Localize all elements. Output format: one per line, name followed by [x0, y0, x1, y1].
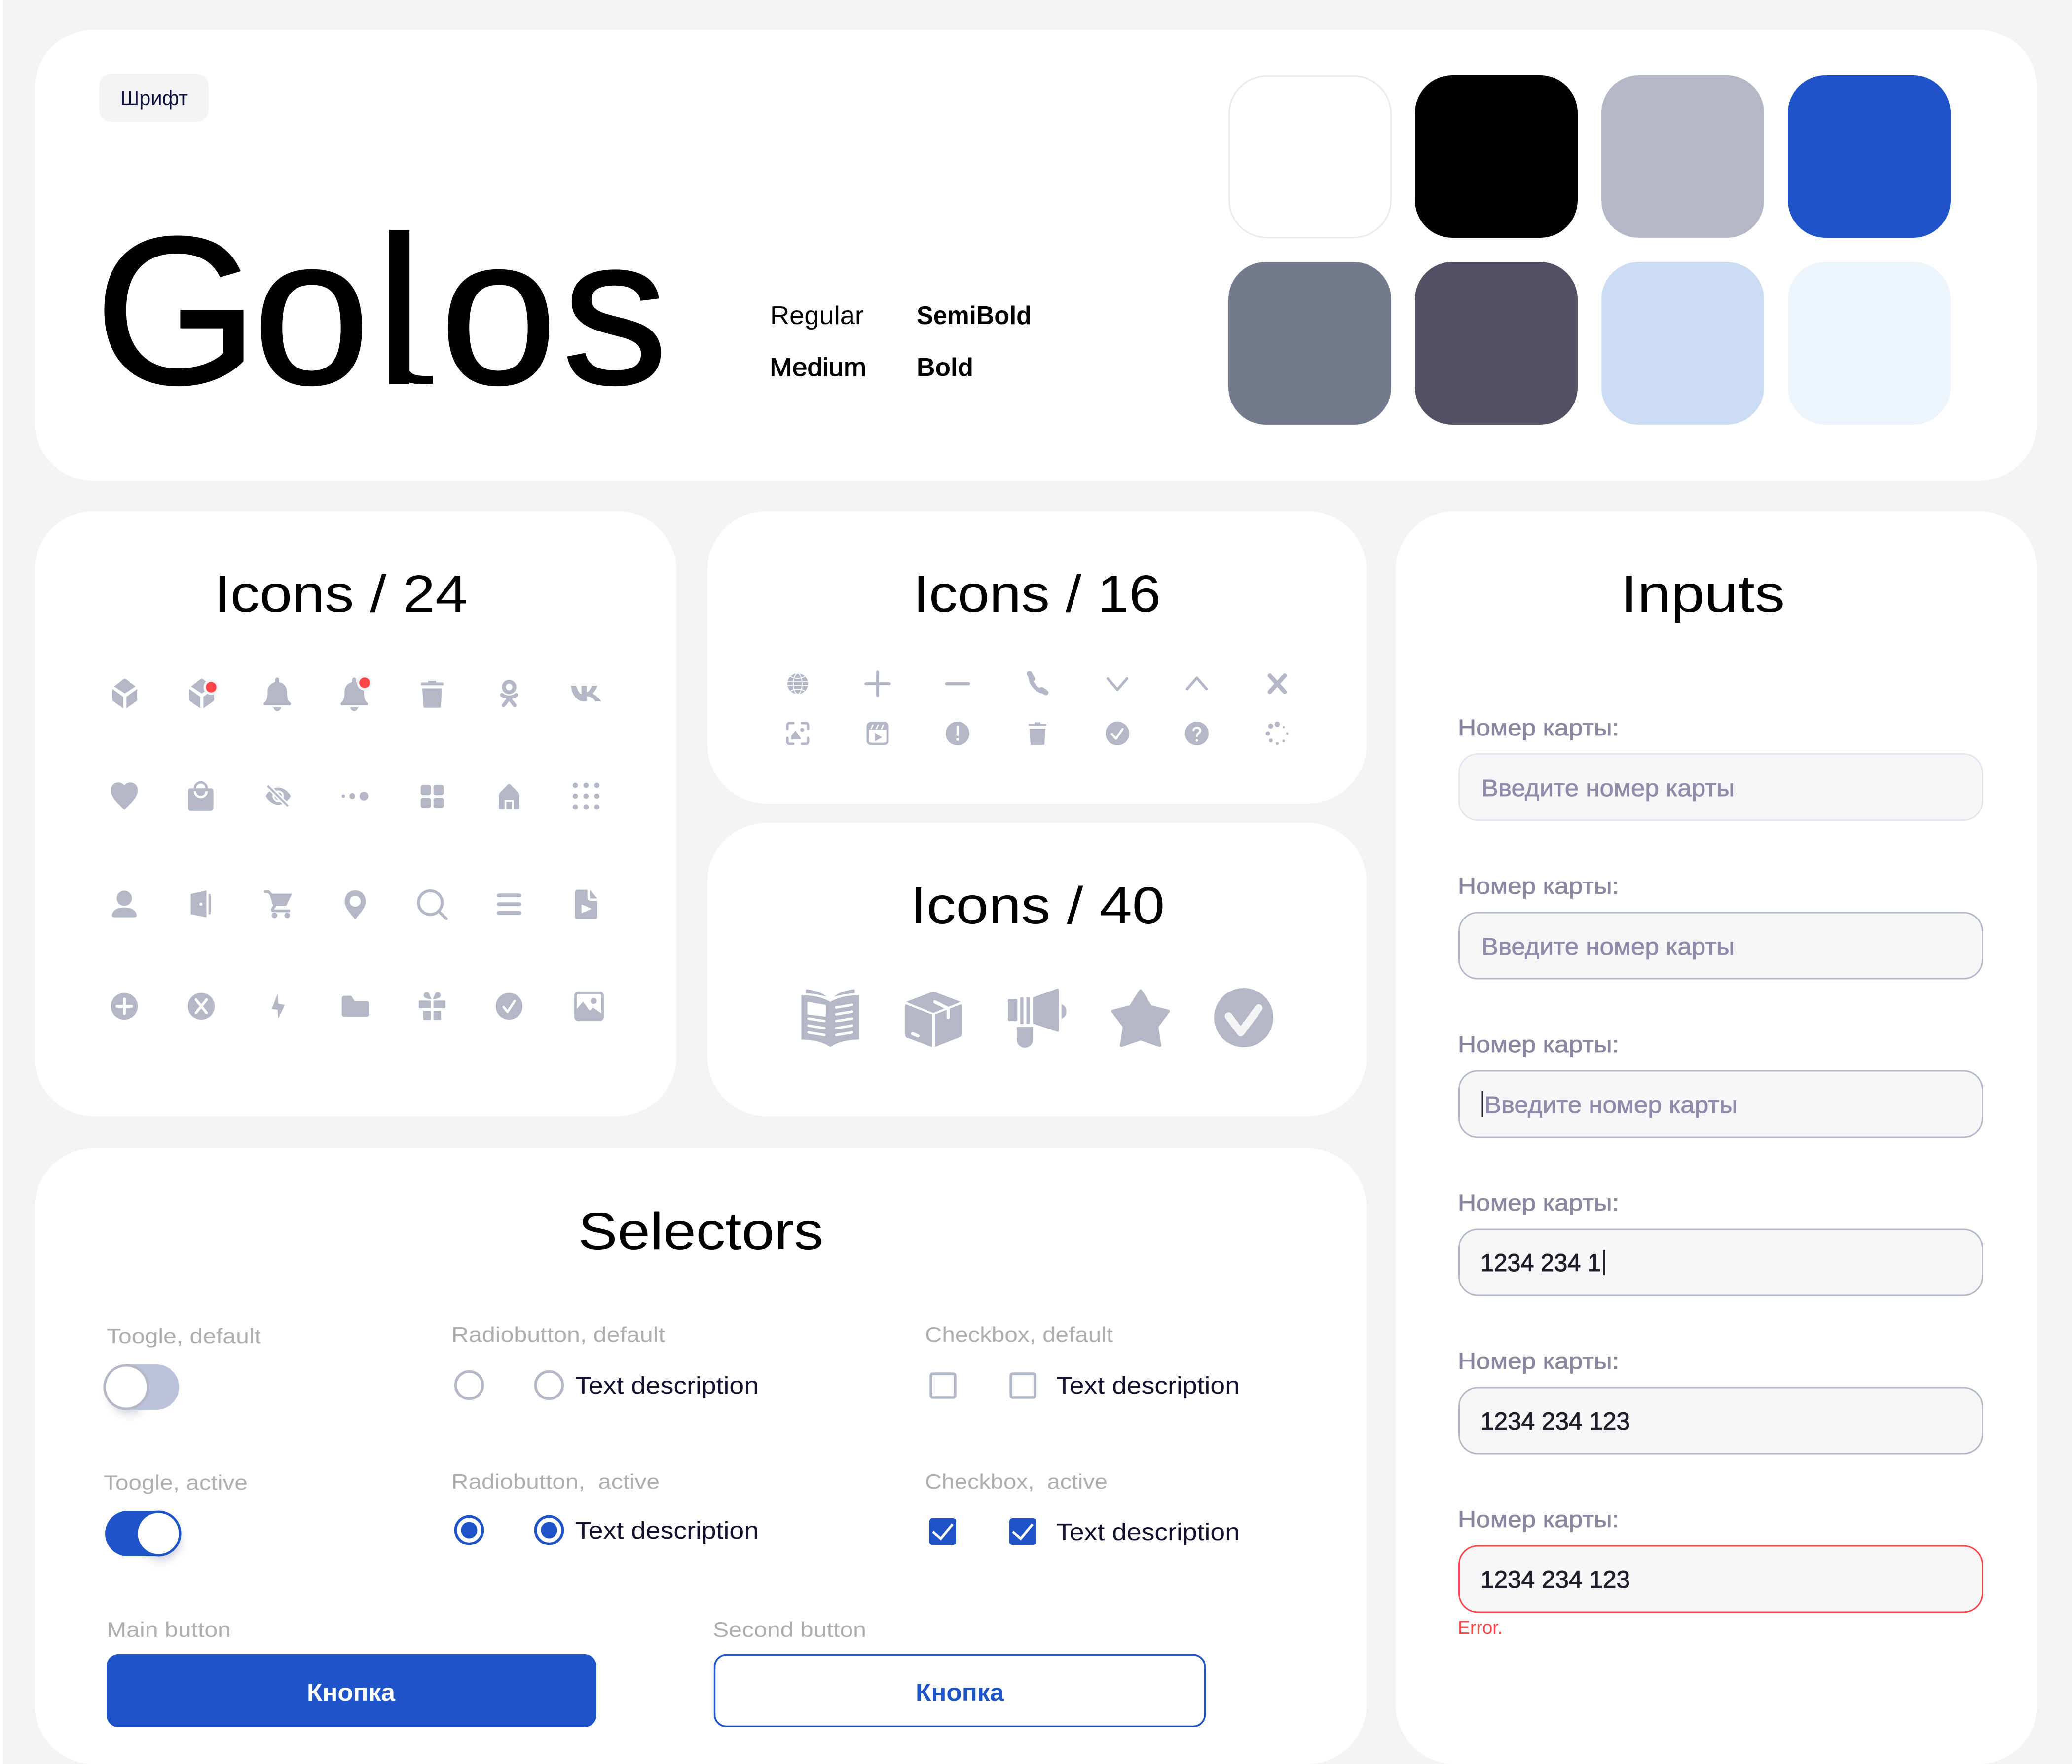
colour swatches	[1228, 75, 1951, 425]
checkbox default	[925, 1323, 1240, 1399]
icon: odnoklassniki	[502, 682, 517, 705]
icon: grid four	[421, 785, 444, 808]
radio active	[451, 1470, 759, 1544]
input: filled: Номер карты:	[1458, 1348, 1619, 1374]
icon: folder	[342, 996, 369, 1017]
main button: Main button	[107, 1618, 231, 1641]
radio active: Radiobutton, active	[451, 1470, 660, 1493]
icon: chevron down	[1108, 679, 1127, 690]
font weights list: Medium	[770, 353, 866, 382]
icon: exclamation circle	[946, 722, 969, 745]
icon: cube	[112, 678, 137, 708]
toggle default: Toogle, default	[107, 1324, 261, 1348]
icon: close	[1270, 676, 1285, 692]
icon: plus	[866, 672, 889, 696]
input: error: Номер карты:	[1458, 1507, 1619, 1532]
icon: eye off	[266, 786, 291, 806]
icon: question circle	[1185, 722, 1209, 745]
icon: three dots	[342, 792, 368, 801]
panel: font header	[35, 30, 2037, 481]
heading: Selectors: Selectors	[578, 1202, 823, 1260]
icon: cart	[265, 892, 292, 918]
icon: phone	[1030, 674, 1046, 693]
icon: nine dots	[573, 783, 599, 809]
icon row 40	[801, 988, 1273, 1048]
icon: star	[1113, 991, 1168, 1046]
main button	[107, 1618, 596, 1727]
input: error	[1458, 1507, 1982, 1638]
icon: image	[574, 992, 604, 1021]
icon: map pin	[345, 890, 366, 919]
icon: menu	[499, 895, 519, 913]
checkbox active: Checkbox, active	[925, 1470, 1108, 1493]
input: focus with caret: Номер карты:	[1458, 1031, 1619, 1057]
second button	[713, 1618, 1205, 1727]
icon: heart	[111, 782, 138, 810]
icon grid 24	[111, 675, 604, 1021]
icon: bell	[263, 677, 291, 711]
radio default	[451, 1323, 759, 1399]
toggle active	[104, 1471, 248, 1560]
checkbox default: Checkbox, default	[925, 1323, 1113, 1346]
font weights list	[770, 301, 1032, 382]
heading: Icons / 24: Icons / 24	[214, 565, 468, 623]
input: default: Номер карты:	[1458, 715, 1619, 740]
heading: Icons / 16: Icons / 16	[913, 565, 1161, 623]
input: focus with caret	[1458, 1031, 1982, 1137]
input: filled	[1458, 1348, 1982, 1454]
checkbox active	[925, 1470, 1240, 1545]
icon: vk	[571, 686, 601, 701]
heading: Inputs: Inputs	[1621, 565, 1785, 623]
icon: shopping bag	[188, 782, 214, 811]
input: typing: Номер карты:	[1458, 1190, 1619, 1215]
icon: door	[191, 890, 211, 918]
icon: chevron up	[1187, 678, 1207, 689]
main button: Кнопка	[307, 1679, 396, 1706]
icon: video clapper	[868, 723, 888, 744]
icon: cube with notification	[189, 678, 219, 708]
panel: Inputs	[1396, 511, 2037, 1764]
toggle default	[104, 1324, 261, 1414]
input: hover: Введите номер карты	[1481, 934, 1735, 960]
checkbox default: Text description	[1056, 1373, 1240, 1399]
toggle active: Toogle, active	[104, 1471, 248, 1494]
icon: box	[905, 992, 962, 1047]
icon: globe	[787, 673, 808, 694]
panel: Selectors	[35, 1148, 1367, 1764]
input: default	[1458, 715, 1982, 820]
panel: Icons / 40	[707, 823, 1367, 1116]
icon: home	[499, 784, 519, 809]
icon: user	[112, 891, 137, 918]
icon grid 16	[787, 672, 1289, 745]
radio default: Radiobutton, default	[451, 1323, 665, 1346]
icon: megaphone	[1008, 989, 1067, 1048]
input: hover: Номер карты:	[1458, 873, 1619, 899]
input: hover	[1458, 873, 1982, 979]
radio active: Text description	[575, 1518, 759, 1544]
icon: minus	[946, 683, 969, 684]
font weights list: Regular	[770, 301, 864, 330]
badge: Шрифт: Шрифт	[120, 86, 188, 110]
input: default: Введите номер карты	[1481, 775, 1735, 802]
input: error: Error.	[1458, 1617, 1503, 1638]
panel: Icons / 16	[707, 511, 1367, 804]
input: filled: 1234 234 123	[1480, 1407, 1630, 1435]
title: Golos: Golos	[95, 193, 667, 428]
font weights list: Bold	[917, 353, 973, 382]
panel: Icons / 24	[35, 511, 676, 1116]
icon: trash	[421, 681, 444, 708]
icon: check circle large	[1214, 988, 1273, 1047]
second button: Second button	[713, 1618, 866, 1641]
icon: bell with notification	[340, 675, 372, 711]
icon: spinner	[1266, 722, 1289, 745]
second button: Кнопка	[916, 1679, 1004, 1706]
icon: image focus	[787, 723, 808, 744]
font weights list: SemiBold	[917, 301, 1032, 330]
icon: check circle	[496, 993, 522, 1020]
icon: trash small	[1029, 722, 1046, 745]
heading: Icons / 40: Icons / 40	[910, 877, 1165, 935]
icon: bolt	[272, 994, 285, 1019]
icon: gift	[419, 992, 445, 1020]
icon: file play	[575, 890, 597, 919]
input: typing: 1234 234 1	[1480, 1249, 1601, 1277]
badge: Шрифт	[99, 74, 209, 122]
icon: search	[418, 891, 446, 919]
checkbox active: Text description	[1056, 1519, 1240, 1545]
icon: open book	[801, 990, 859, 1047]
radio default: Text description	[575, 1373, 759, 1399]
icon: close circle	[188, 993, 215, 1020]
input: focus with caret: Введите номер карты	[1484, 1092, 1738, 1118]
input: error: 1234 234 123	[1480, 1566, 1630, 1593]
icon: check circle small	[1106, 722, 1129, 745]
input: typing	[1458, 1190, 1982, 1295]
icon: plus circle	[111, 993, 138, 1020]
